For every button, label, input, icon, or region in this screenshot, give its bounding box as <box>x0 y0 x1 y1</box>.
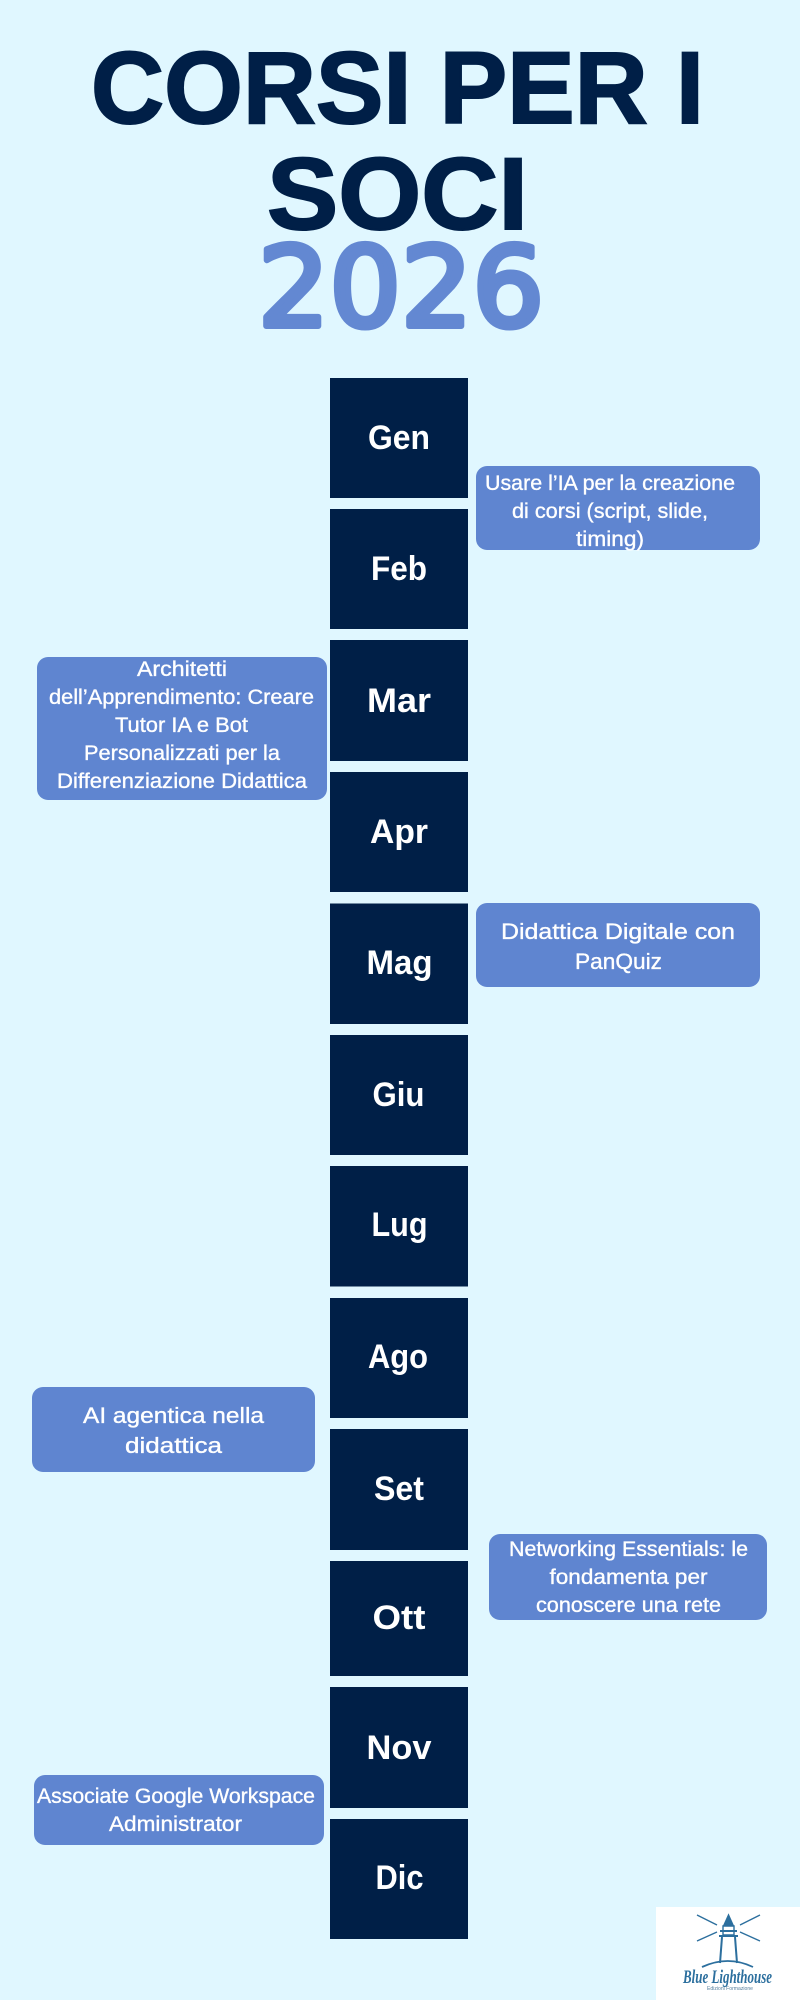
title <box>91 31 704 251</box>
callout: Associate Google Workspace <box>34 1775 324 1845</box>
logo: Blue Lighthouse: Edizioni Formazione <box>707 1986 753 1992</box>
callout: Architetti dell'Apprendimento: Differenziazione Didattica <box>57 770 307 793</box>
month: Gen: Gen <box>368 419 430 457</box>
icon: lighthouse <box>697 1915 760 1967</box>
month: Mar <box>330 640 468 761</box>
callout: Architetti dell'Apprendimento: Architetti <box>137 658 227 681</box>
month: Apr: Apr <box>370 813 428 851</box>
callout: Didattica Digitale <box>476 903 760 987</box>
month: Nov: Nov <box>366 1729 432 1767</box>
callout: AI agentica: didattica <box>125 1433 223 1458</box>
callout: Architetti dell'Apprendimento <box>37 657 327 800</box>
month: Lug: Lug <box>372 1206 428 1244</box>
callout: Usare l'IA: Usare l’IA per la creazione <box>485 472 735 495</box>
month: Ott: Ott <box>372 1599 426 1637</box>
year 2026: 2026 <box>258 224 544 353</box>
month: Ago <box>330 1298 468 1418</box>
callout: Architetti dell'Apprendimento: Personalizzati per la <box>84 742 280 765</box>
callout: Usare l'IA <box>476 466 760 551</box>
month: Giu: Giu <box>372 1076 424 1114</box>
month: Ott <box>330 1561 468 1676</box>
title: SOCI <box>267 137 528 251</box>
month: Feb: Feb <box>371 550 427 588</box>
callout: Didattica Digitale: Didattica Digitale con <box>501 919 735 944</box>
callout: AI agentica <box>32 1387 315 1472</box>
callout: Networking Essentials <box>489 1534 767 1620</box>
callout: Associate Google Workspace: Associate Google Workspace <box>37 1785 315 1808</box>
month: Mag <box>330 904 468 1024</box>
month: Set <box>330 1429 468 1550</box>
month: Ago: Ago <box>368 1338 428 1376</box>
callout: Usare l'IA: timing) <box>576 528 644 551</box>
callout: Didattica Digitale: PanQuiz <box>575 949 662 974</box>
callout: AI agentica: AI agentica nella <box>83 1403 265 1428</box>
month: Gen <box>330 378 468 498</box>
callout: Networking Essentials: Networking Essentials: le <box>509 1538 748 1561</box>
callout: Architetti dell'Apprendimento: Tutor IA e Bot <box>115 714 248 737</box>
month: Dic: Dic <box>376 1859 424 1897</box>
callout: Networking Essentials: conoscere una rete <box>536 1594 721 1617</box>
month: Giu <box>330 1035 468 1155</box>
month: Feb <box>330 509 468 629</box>
month: Mag: Mag <box>366 944 432 982</box>
title: CORSI PER I <box>91 31 704 145</box>
month: Lug <box>330 1166 468 1286</box>
month: Nov <box>330 1687 468 1808</box>
month: Mar: Mar <box>367 682 431 720</box>
month: Set: Set <box>374 1470 424 1508</box>
callout: Architetti dell'Apprendimento: dell’Apprendimento: Creare <box>49 686 314 709</box>
logo: Blue Lighthouse <box>656 1907 800 2000</box>
month: Apr <box>330 772 468 892</box>
callout: Associate Google Workspace: Administrator <box>109 1813 242 1836</box>
callout: Networking Essentials: fondamenta per <box>550 1566 708 1589</box>
callout: Usare l'IA: di corsi (script, slide, <box>512 500 708 523</box>
month: Dic <box>330 1819 468 1939</box>
